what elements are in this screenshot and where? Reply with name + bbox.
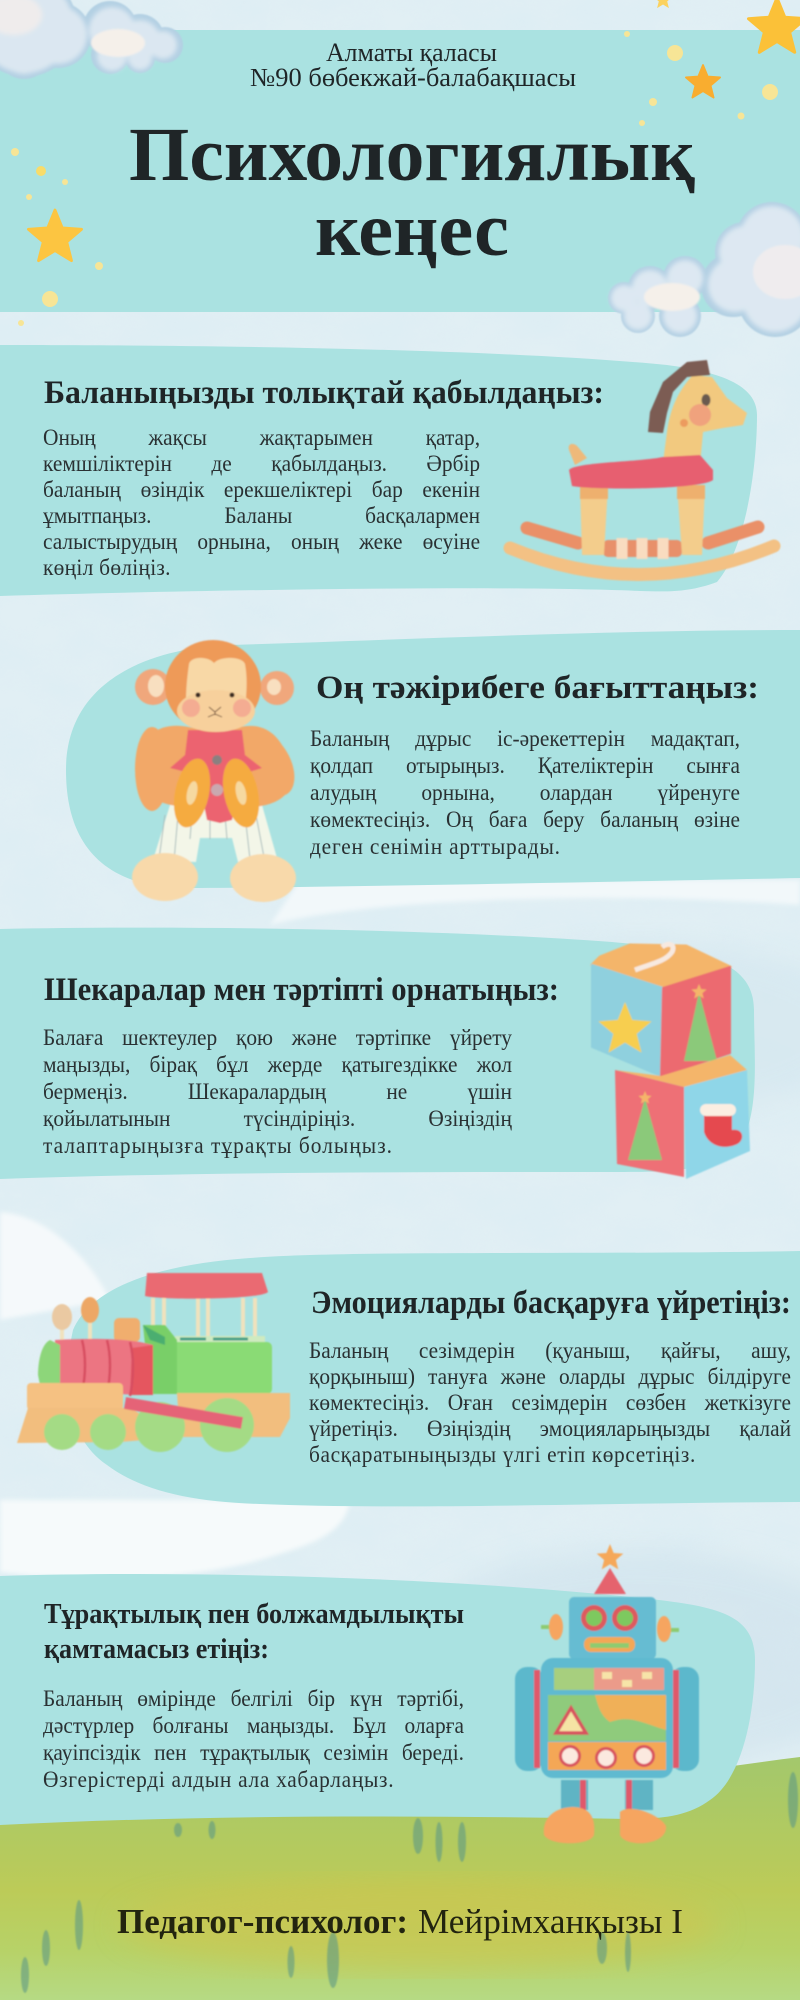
school name: №90 бөбекжай-балабақшасы — [250, 63, 576, 92]
text: body: Оның жақсы жақтарымен қатар, — [43, 424, 480, 450]
header band — [0, 30, 800, 312]
text: body: қорқыныш) тануға және оларды дұрыс білдіруге — [309, 1364, 791, 1388]
heading: Баланыңызды толықтай қабылдаңыз: — [44, 375, 604, 411]
icon: monkey toy — [132, 640, 296, 902]
text: body: Баланың сезімдерін (қуаныш, қайғы, ашу, — [309, 1338, 791, 1362]
heading: Оң тәжірибеге бағыттаңыз: — [316, 670, 759, 706]
text: body: көңіл бөліңіз. — [43, 554, 171, 580]
panel: teach emotion management — [16, 1251, 800, 1506]
text: body — [43, 424, 480, 580]
text: body: бермеңіз. Шекаралардың не үшін — [43, 1078, 512, 1104]
text: body: үйретіңіз. Өзіңіздің эмоцияларыңызды қалай — [309, 1416, 791, 1440]
text: body: Баланың дұрыс іс-әрекеттерін мадақтап, — [310, 726, 740, 750]
panel: stability and predictability — [0, 1544, 755, 1844]
text: body: кемшіліктерін де қабылдаңыз. Әрбір — [43, 450, 480, 476]
school name: Алматы қаласы — [326, 38, 497, 67]
text: body: баланың өзіндік ерекшеліктері бар екенін — [43, 476, 480, 502]
text: body: көмектесіңіз. Оған сезімдерін сөзбен жеткізуге — [309, 1390, 791, 1414]
heading: Шекаралар мен тәртіпті орнатыңыз: — [44, 972, 559, 1008]
text: body: қолдап отырыңыз. Қателіктерін сынға — [310, 752, 740, 778]
title: Психологиялық — [129, 113, 695, 197]
text: body: салыстырудың орнына, оның жеке өсуіне — [43, 528, 480, 554]
text: body: Өзгерістерді алдын ала хабарлаңыз. — [43, 1766, 394, 1792]
text: body: ұмытпаңыз. Баланы басқалармен — [43, 502, 480, 528]
title — [129, 113, 695, 272]
heading: Тұрақтылық пен болжамдылықты — [44, 1599, 464, 1630]
text: body: Баланың өмірінде белгілі бір күн тәртібі, — [43, 1686, 464, 1710]
footer: author: Педагог-психолог: — [117, 1902, 408, 1941]
text: body — [310, 726, 740, 859]
footer: author — [117, 1902, 683, 1941]
text: body — [43, 1686, 464, 1792]
text: body: маңызды, бірақ бұл жерде қатыгездікке жол — [43, 1052, 512, 1076]
text: body: қойылатынын түсіндіріңіз. Өзіңіздің — [43, 1106, 512, 1130]
text: body: қауіпсіздік пен тұрақтылық сезімін береді. — [43, 1740, 464, 1764]
icon: toy robot — [515, 1544, 699, 1843]
text: body: көмектесіңіз. Оң баға беру баланың өзіне — [310, 806, 740, 832]
cloud: top left — [0, 0, 183, 79]
text: body: деген сенімін арттырады. — [310, 834, 561, 858]
heading — [44, 1599, 464, 1665]
footer: author: Мейрімханқызы І — [418, 1902, 683, 1941]
panel: set boundaries and discipline — [0, 928, 755, 1180]
text: body: талаптарыңызға тұрақты болыңыз. — [43, 1132, 393, 1158]
icon: rocking horse — [510, 360, 774, 575]
text: body: дәстүрлер болғаны маңызды. Бұл оларға — [43, 1712, 464, 1738]
heading: қамтамасыз етіңіз: — [44, 1634, 269, 1665]
school name — [250, 38, 576, 92]
text: body: Балаға шектеулер қою және тәртіпке үйрету — [43, 1024, 512, 1050]
icon: toy blocks — [592, 944, 750, 1179]
stars — [28, 0, 800, 261]
title: кеңес — [315, 188, 509, 272]
text: body — [43, 1024, 512, 1158]
cloud: bottom right — [608, 202, 800, 337]
text: body: басқаратыныңызды үлгі етіп көрсетіңіз. — [309, 1442, 696, 1466]
text: body: алудың орнына, олардан үйренуге — [310, 780, 740, 804]
text: body — [309, 1338, 791, 1467]
panel: accept your child — [0, 345, 782, 596]
panel: focus on positive experience — [66, 630, 800, 903]
icon: clouds and stars — [0, 0, 800, 338]
dots — [11, 31, 778, 326]
icon: toy train — [17, 1273, 290, 1452]
